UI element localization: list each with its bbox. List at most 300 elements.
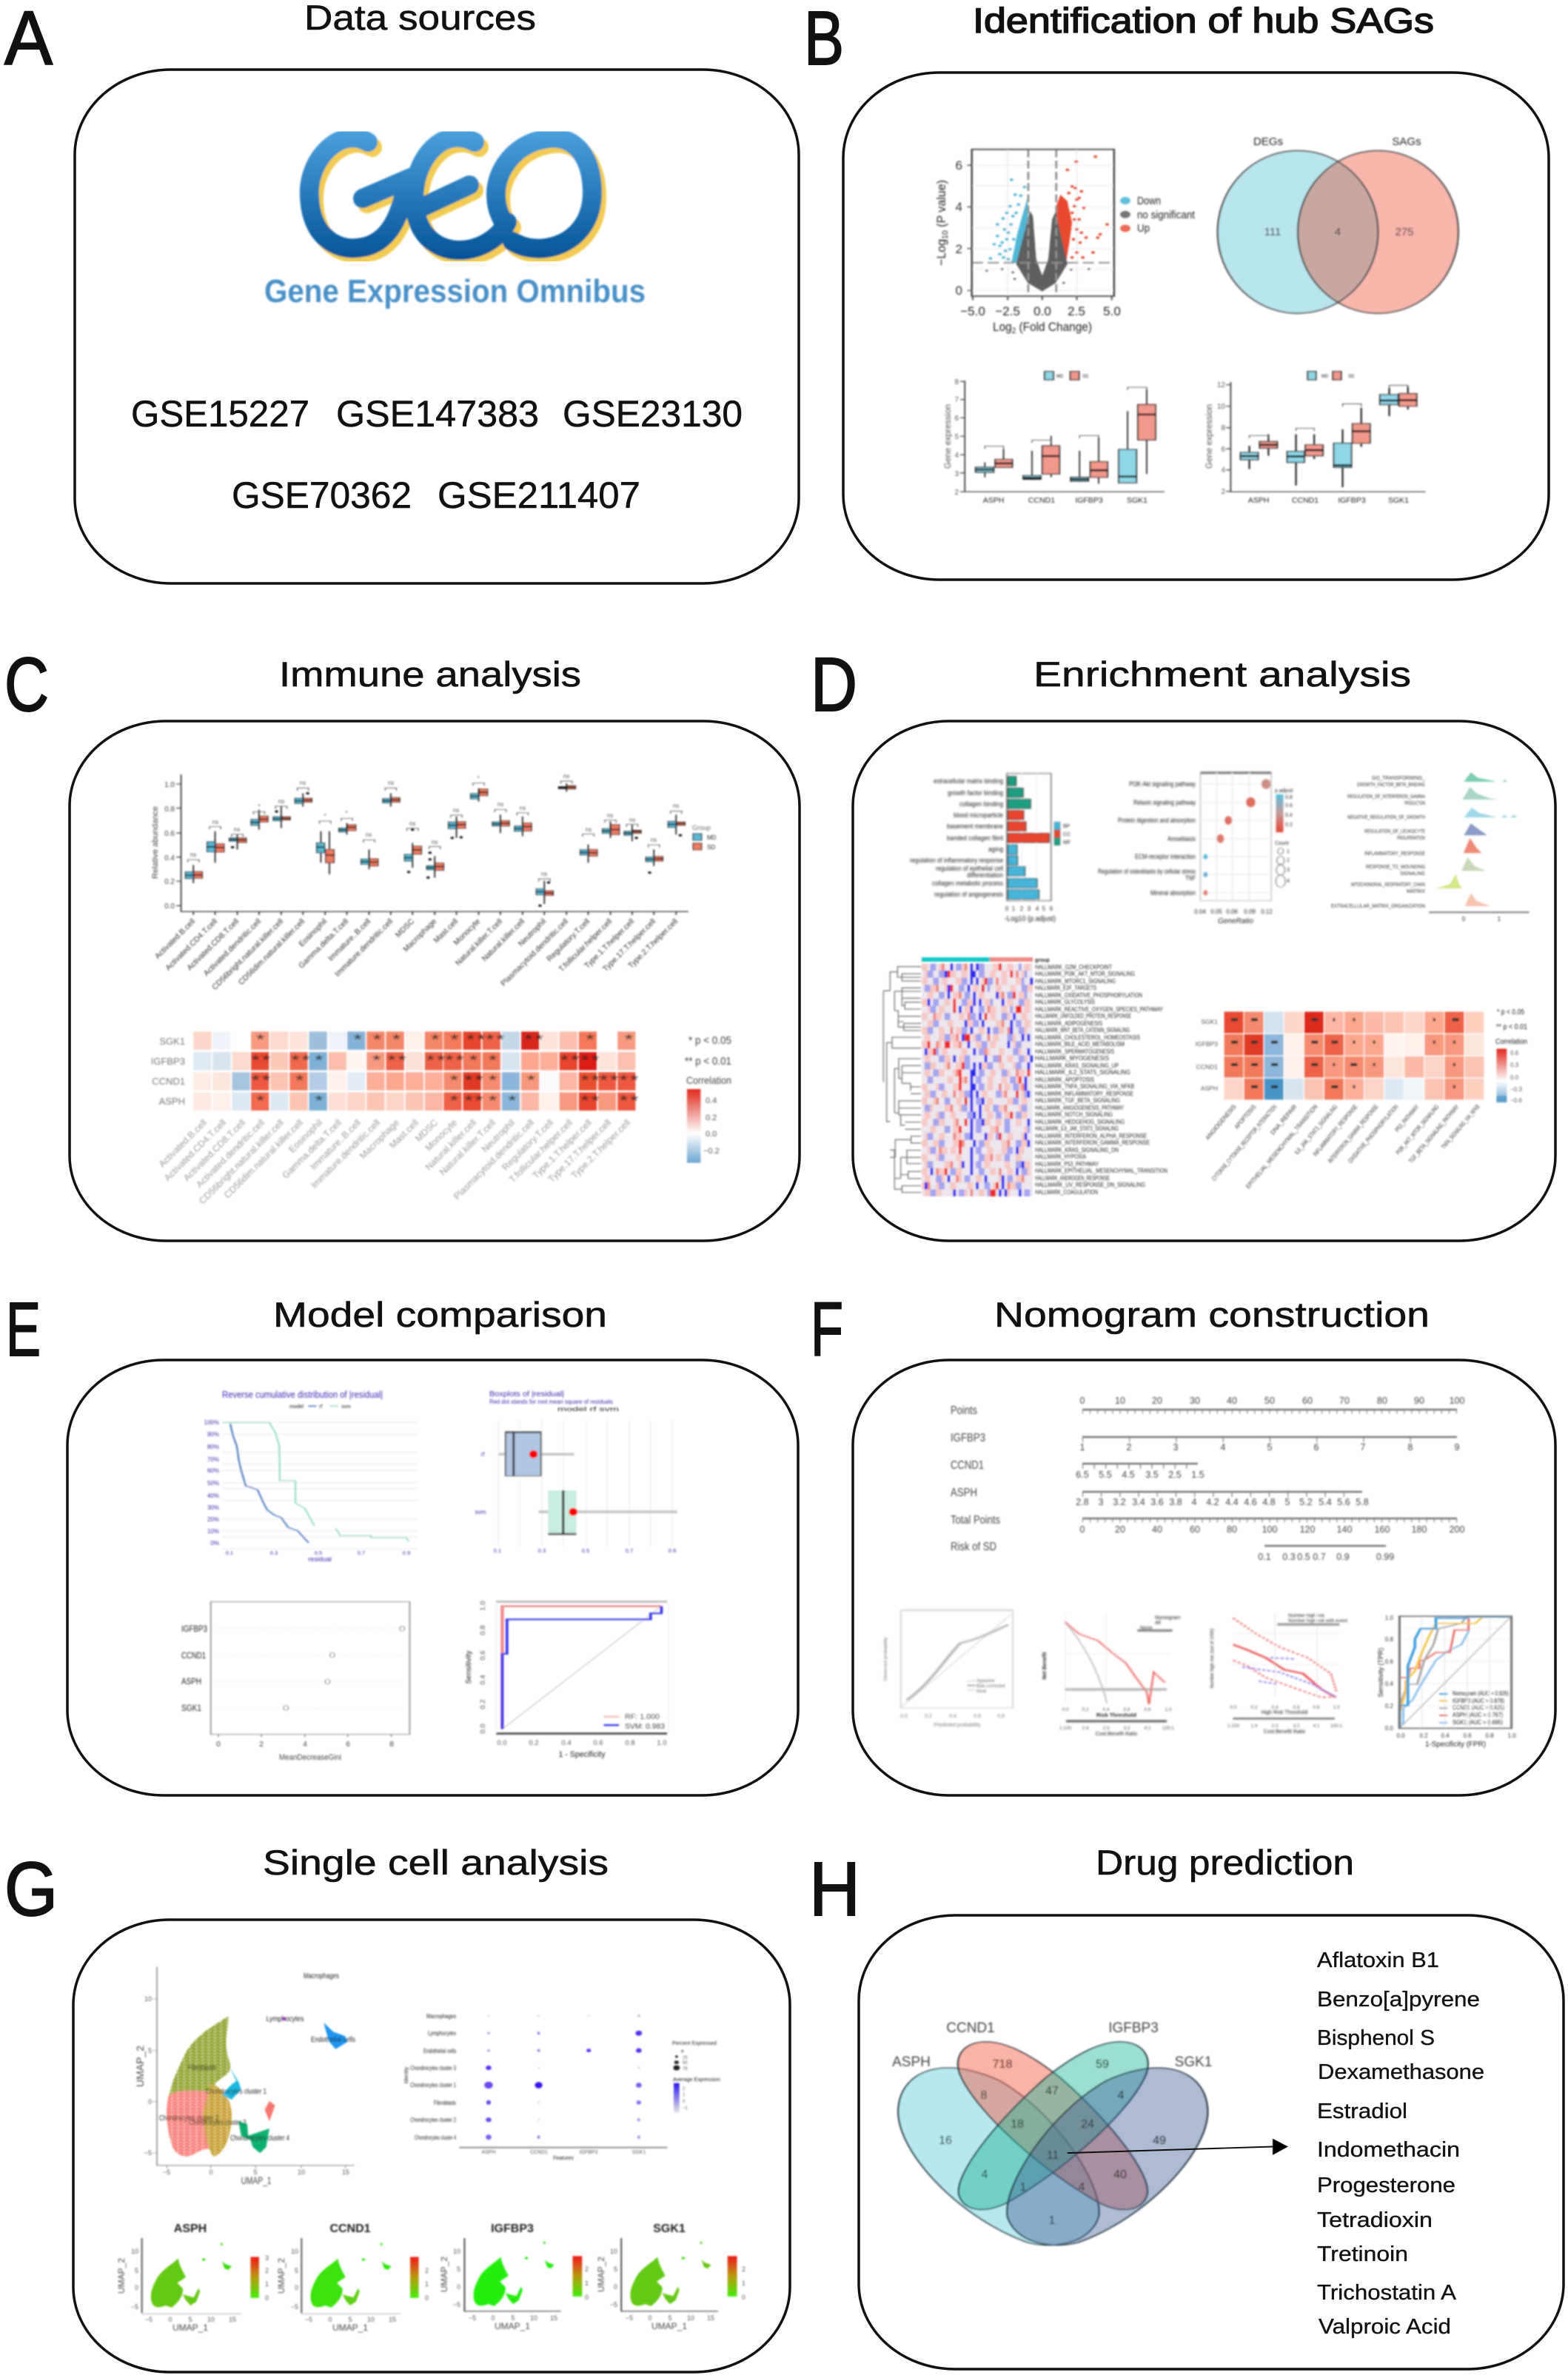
heatmap: gene-pathway correlation: 0.3 <box>1510 1062 1519 1068</box>
heatmap: gene-immune cell correlation: Plasmacytoid.dendritic.cell <box>452 1117 536 1202</box>
venn diagram: DEGs vs SAGs: DEGs <box>1253 135 1283 148</box>
UMAP cluster plot: Chondrocytes cluster 2 <box>159 2114 218 2123</box>
UMAP cluster plot: UMAP_2 <box>134 2046 146 2087</box>
ROC curves: nomogram and genes: 1-Specificity (FPR) <box>1425 1741 1486 1749</box>
feature plot: ASPH: 15 <box>229 2316 236 2323</box>
decision curve analysis: None <box>1140 1626 1153 1631</box>
feature plot: ASPH: −5 <box>145 2316 153 2323</box>
box plot: validation set gene expression: 2 <box>1221 488 1225 496</box>
feature plot: CCND1: 15 <box>389 2316 396 2323</box>
bubble plot: KEGG enrichment: Mineral absorption <box>1150 889 1196 897</box>
bar chart: GO enrichment <box>910 774 1071 923</box>
bubble plot: KEGG enrichment: p.adjust <box>1275 788 1293 794</box>
feature plot: ASPH: ASPH <box>174 2223 207 2235</box>
nomogram: 0 <box>1080 1396 1085 1406</box>
heatmap: GSVA pathways with dendrogram: HALLMARK_MYOGENESIS <box>1035 1054 1109 1062</box>
clinical impact curve: 1:4 <box>1250 1724 1258 1729</box>
nomogram: 0.3 <box>1282 1552 1296 1562</box>
heatmap: gene-immune cell correlation: Activated.CD4.T.cell <box>162 1117 228 1183</box>
heatmap: gene-immune cell correlation: Natural.killer.cell <box>423 1117 478 1172</box>
nomogram: IGFBP3 <box>951 1432 985 1444</box>
ROC curves: nomogram and genes: 0.6 <box>1463 1732 1472 1739</box>
nomogram: 3.6 <box>1150 1497 1164 1507</box>
ROC curves: RF vs SVM: 0.6 <box>479 1650 487 1661</box>
dot plot: random forest importance <box>181 1601 409 1762</box>
panel letter H: H <box>809 1846 860 1932</box>
clinical impact curve: 1:100 <box>1227 1724 1240 1729</box>
heatmap: GSVA pathways with dendrogram: HALLMARK_INTERFERON_ALPHA_RESPONSE <box>1035 1132 1147 1139</box>
venn diagram: four genes: ASPH <box>892 2054 931 2070</box>
box plot: residuals: 0.3 <box>538 1547 546 1554</box>
box plot: immune cell abundance: 0.8 <box>164 805 175 814</box>
venn diagram: four genes <box>892 2020 1212 2245</box>
nomogram: 1.5 <box>1191 1470 1205 1480</box>
dot plot: random forest importance: MeanDecreaseGini <box>279 1753 341 1762</box>
bubble plot: KEGG enrichment: 4 <box>1287 879 1290 884</box>
heatmap: GSVA pathways with dendrogram: HALLMARK_UNFOLDED_PROTEIN_RESPONSE <box>1035 1012 1131 1019</box>
venn diagram: four genes: 4 <box>982 2168 988 2181</box>
ridge plot: GSEA: NEGATIVE_REGULATION_OF_GROWTH <box>1347 814 1425 820</box>
box plot: immune cell abundance: * <box>324 813 326 820</box>
drug list: Tetradioxin <box>1317 2208 1433 2232</box>
heatmap: gene-immune cell correlation: 0.4 <box>706 1096 717 1105</box>
nomogram: 5.2 <box>1299 1497 1313 1507</box>
ROC curves: nomogram and genes: 0.4 <box>1385 1681 1394 1687</box>
calibration curve <box>883 1610 1013 1728</box>
UMAP cluster plot: 10 <box>144 1995 152 2003</box>
nomogram: 0 <box>1080 1524 1085 1535</box>
feature plot: ASPH: 1 <box>265 2280 269 2288</box>
nomogram: 200 <box>1450 1524 1464 1535</box>
dot plot: random forest importance: 4 <box>303 1740 307 1749</box>
decision curve analysis: 3:2 <box>1123 1726 1130 1731</box>
nomogram: 3 <box>1173 1442 1179 1453</box>
nomogram: 7 <box>1361 1442 1366 1453</box>
feature plot: IGFBP3: −5 <box>469 2314 476 2322</box>
heatmap: GSVA pathways with dendrogram: HALLMARK_APOPTOSIS <box>1035 1076 1094 1083</box>
nomogram: 4.2 <box>1206 1497 1219 1507</box>
arrow <box>1068 2139 1288 2155</box>
box plot: validation set gene expression: IGFBP3 <box>1338 496 1366 505</box>
box plot: immune cell abundance: Mast.cell <box>432 917 460 945</box>
dot plot: gene expression by cell type: Features <box>553 2156 574 2161</box>
nomogram: ASPH <box>951 1487 977 1499</box>
heatmap: gene-immune cell correlation: Type.1.T.helper.cell <box>531 1117 594 1181</box>
box plot: residuals: 0.7 <box>626 1547 633 1554</box>
clinical impact curve: 1.0 <box>1333 1705 1340 1710</box>
venn diagram: four genes: 718 <box>993 2058 1012 2071</box>
panel letter D: D <box>811 642 857 727</box>
heatmap: GSVA pathways with dendrogram <box>883 957 1167 1196</box>
ridge plot: GSEA: 0 <box>1462 916 1466 922</box>
line chart: reverse cumulative distribution of residuals: 40% <box>207 1493 219 1499</box>
bubble plot: KEGG enrichment: Count <box>1275 841 1289 846</box>
heatmap: gene-immune cell correlation: CD56dim.natural.killer.cell <box>222 1117 305 1200</box>
box plot: immune cell abundance: 0.0 <box>164 902 175 911</box>
drug list: Dexamethasone <box>1318 2060 1484 2084</box>
ridge plot: GSEA: PRODUCTION <box>1404 800 1425 806</box>
volcano plot: (Fold Change) <box>1016 320 1092 334</box>
venn diagram: four genes: 59 <box>1096 2058 1109 2071</box>
box plot: immune cell abundance: ns <box>190 851 196 858</box>
decision curve analysis: All <box>1155 1621 1161 1626</box>
dot plot: gene expression by cell type: Percent Expressed <box>672 2041 717 2046</box>
dot plot: gene expression by cell type: 50 <box>683 2061 688 2066</box>
box plot: training set gene expression: 4 <box>954 452 959 460</box>
line chart: reverse cumulative distribution of residuals: 10% <box>207 1528 219 1535</box>
heatmap: gene-immune cell correlation: *********** <box>256 1093 638 1109</box>
box plot: immune cell abundance: Immature..B.cell <box>326 917 372 963</box>
decision curve analysis: 1:4 <box>1082 1726 1089 1731</box>
clinical impact curve: 100:1 <box>1330 1724 1343 1729</box>
dot plot: random forest importance: SGK1 <box>181 1704 201 1713</box>
box plot: residuals: 0.1 <box>494 1547 501 1554</box>
panel: F nomogram construction <box>853 1360 1555 1795</box>
UMAP cluster plot: 10 <box>298 2168 305 2176</box>
nomogram: 80 <box>1227 1524 1237 1535</box>
clinical impact curve: 0.0 <box>1230 1705 1237 1710</box>
UMAP cluster plot: 5 <box>253 2168 258 2176</box>
nomogram: 50 <box>1264 1396 1275 1406</box>
feature plot: IGFBP3: IGFBP3 <box>491 2223 534 2235</box>
dot plot: random forest importance: 8 <box>389 1740 394 1749</box>
feature plot: ASPH: 0 <box>265 2294 269 2302</box>
ROC curves: nomogram and genes: ASPH (AUC = 0.767) <box>1453 1712 1503 1718</box>
box plot: immune cell abundance: * <box>258 803 261 810</box>
heatmap: gene-pathway correlation: Correlation <box>1495 1038 1527 1046</box>
heatmap: gene-immune cell correlation: ************** <box>256 1031 633 1048</box>
feature plot: ASPH: 10 <box>207 2316 215 2323</box>
feature plot: ASPH: 3 <box>265 2254 269 2262</box>
ROC curves: RF vs SVM: 0.8 <box>625 1739 635 1747</box>
UMAP cluster plot: 0 <box>148 2098 152 2106</box>
nomogram: 2 <box>1127 1442 1132 1453</box>
box plot: immune cell abundance: ns <box>651 837 657 843</box>
bubble plot: KEGG enrichment: 1 <box>1287 849 1290 854</box>
nomogram: 2.5 <box>1168 1470 1182 1480</box>
nomogram: 3.8 <box>1169 1497 1182 1507</box>
nomogram: 100 <box>1450 1396 1464 1406</box>
UMAP cluster plot: 0 <box>209 2168 213 2176</box>
feature plot: CCND1: 0 <box>295 2284 298 2291</box>
heatmap: GSVA pathways with dendrogram: HALLMARK_G2M_CHECKPOINT <box>1035 963 1112 971</box>
dot plot: gene expression by cell type: Endothelial cells <box>423 2048 456 2054</box>
heatmap: GSVA pathways with dendrogram: HALLMARK_CHOLESTEROL_HOMEOSTASIS <box>1035 1034 1140 1041</box>
UMAP cluster plot: Chondrocytes cluster 1 <box>206 2088 267 2096</box>
nomogram: 100 <box>1262 1524 1277 1535</box>
bubble plot: KEGG enrichment: 0.05 <box>1210 908 1222 915</box>
ROC curves: RF vs SVM: SVM: 0.983 <box>625 1722 665 1731</box>
line chart: reverse cumulative distribution of residuals: 0.3 <box>270 1550 278 1556</box>
heatmap: gene-immune cell correlation: ** p < 0.01 <box>685 1055 731 1068</box>
panel letter E: E <box>6 1287 41 1372</box>
dot plot: gene expression by cell type: Chondrocytes cluster 4 <box>415 2134 456 2141</box>
line chart: reverse cumulative distribution of residuals: rf <box>319 1404 322 1410</box>
box plot: training set gene expression: 2 <box>954 489 959 497</box>
box plot: immune cell abundance: ns <box>453 807 459 814</box>
box plot: immune cell abundance: Activated.dendritic.cell <box>202 917 263 978</box>
box plot: immune cell abundance <box>151 773 717 992</box>
venn diagram: four genes: 1 <box>1049 2214 1056 2227</box>
feature plot: IGFBP3: 0 <box>457 2283 460 2291</box>
calibration curve: 0.6 <box>974 1714 981 1719</box>
feature plot: IGFBP3: 0 <box>585 2294 589 2301</box>
heatmap: gene-immune cell correlation: Activated.dendritic.cell <box>194 1117 267 1190</box>
volcano plot: −2.5 <box>995 304 1020 318</box>
feature plot: CCND1: 0 <box>425 2294 429 2302</box>
box plot: immune cell abundance: Activated.B.cell <box>153 917 197 961</box>
calibration curve: Ideal <box>976 1689 986 1694</box>
nomogram: 180 <box>1412 1524 1427 1535</box>
heatmap: GSVA pathways with dendrogram: HALLMARK_GLYCOLYSIS <box>1035 998 1095 1005</box>
heatmap: gene-pathway correlation: CYTOKINE_CYTOKINE_RECEPTOR_INTERACTION <box>1210 1103 1279 1182</box>
heatmap: gene-pathway correlation: APOPTOSIS <box>1233 1103 1258 1131</box>
box plot: training set gene expression: IGFBP3 <box>1075 496 1103 505</box>
venn diagram: four genes: 49 <box>1153 2134 1166 2147</box>
box plot: immune cell abundance: Regulatory.T.cell <box>545 917 592 963</box>
bar chart: GO enrichment: 1 <box>1012 905 1016 912</box>
bar chart: GO enrichment: blood microparticle <box>954 811 1003 820</box>
heatmap: GSVA pathways with dendrogram: HALLMARK_SPERMATOGENESIS <box>1035 1048 1114 1055</box>
nomogram: Risk of SD <box>951 1541 996 1553</box>
feature plot: CCND1: CCND1 <box>329 2223 371 2235</box>
panel: E model comparison <box>67 1360 798 1795</box>
line chart: reverse cumulative distribution of residuals: 70% <box>207 1456 219 1463</box>
panel: G single cell analysis <box>73 1920 790 2372</box>
venn diagram: four genes: 8 <box>981 2089 988 2102</box>
volcano plot: 10 <box>941 230 950 239</box>
decision curve analysis <box>1042 1612 1181 1737</box>
venn diagram: four genes: 24 <box>1081 2118 1094 2131</box>
heatmap: gene-immune cell correlation: −0.2 <box>703 1147 720 1156</box>
box plot: immune cell abundance: MDSC <box>394 917 416 940</box>
heatmap: gene-pathway correlation: P53_PATHWAY <box>1393 1103 1421 1133</box>
box plot: immune cell abundance: Eosinophil <box>297 917 329 948</box>
heatmap: gene-pathway correlation: IL6_JAK_STAT3_SIGNALING <box>1293 1103 1339 1156</box>
ridge plot: GSEA: GROWTH_FACTOR_BETA_BINDING <box>1357 781 1425 788</box>
nomogram: 3 <box>1099 1497 1104 1507</box>
heatmap: GSVA pathways with dendrogram: HALLMARK_E2F_TARGETS <box>1035 984 1096 991</box>
venn diagram: four genes: SGK1 <box>1175 2054 1212 2070</box>
bubble plot: KEGG enrichment: 0.12 <box>1261 908 1273 915</box>
clinical impact curve: 3:2 <box>1293 1724 1300 1729</box>
heatmap: gene-pathway correlation: ANGIOGENESIS <box>1204 1103 1238 1141</box>
box plot: immune cell abundance: ns <box>541 871 547 877</box>
heatmap: gene-pathway correlation: OXIDATIVE_PHOSPHORYLATION <box>1347 1103 1400 1165</box>
venn diagram: DEGs vs SAGs: 4 <box>1335 226 1341 238</box>
clinical impact curve <box>1210 1612 1347 1735</box>
box plot: immune cell abundance: CD56bright.natural.killer.cell <box>210 917 285 992</box>
box plot: immune cell abundance: 0.6 <box>164 830 175 838</box>
box plot: immune cell abundance: Natural.killer.T.cell <box>454 917 504 968</box>
feature plot: ASPH: 0 <box>135 2284 138 2291</box>
heatmap: gene-immune cell correlation: 0.0 <box>706 1130 717 1139</box>
heatmap: gene-immune cell correlation: Eosinophil <box>287 1117 324 1155</box>
box plot: immune cell abundance: ns <box>629 817 635 823</box>
nomogram: Total Points <box>951 1514 1000 1527</box>
nomogram: 0.1 <box>1258 1552 1271 1562</box>
clinical impact curve: 0.2 <box>1250 1705 1258 1710</box>
heatmap: gene-pathway correlation: SGK1 <box>1201 1018 1218 1025</box>
decision curve analysis: 4:1 <box>1144 1726 1151 1731</box>
nomogram: 20 <box>1115 1524 1125 1535</box>
venn diagram: four genes: 11 <box>1047 2149 1059 2162</box>
ROC curves: RF vs SVM: 0.2 <box>479 1699 487 1709</box>
feature plot: IGFBP3: 5 <box>457 2265 460 2273</box>
bar chart: GO enrichment: CC <box>1063 832 1071 837</box>
box plot: immune cell abundance: ns <box>497 801 503 808</box>
panel: C immune analysis <box>70 721 800 1241</box>
calibration curve: 0.2 <box>925 1714 932 1719</box>
feature plot: IGFBP3: 15 <box>550 2314 557 2322</box>
dot plot: gene expression by cell type: 0 <box>681 2050 684 2054</box>
heatmap: GSVA pathways with dendrogram: HALLMARK_KRAS_SIGNALING_UP <box>1035 1062 1119 1069</box>
feature plot: IGFBP3: UMAP_2 <box>439 2257 449 2292</box>
box plot: validation set gene expression: 10 <box>1217 403 1225 411</box>
dot plot: gene expression by cell type: CCND1 <box>530 2150 548 2155</box>
dot plot: gene expression by cell type: Chondrocytes cluster 2 <box>410 2117 456 2123</box>
heading: Nomogram construction: Nomogram construction <box>994 1295 1430 1334</box>
drug list: Trichostatin A <box>1317 2281 1457 2305</box>
heading: Drug prediction: Drug prediction <box>1096 1843 1354 1882</box>
bar chart: GO enrichment: 0 <box>1005 905 1009 912</box>
feature plot: SGK1: 0 <box>614 2283 617 2291</box>
nomogram: 160 <box>1375 1524 1390 1535</box>
box plot: immune cell abundance: ns <box>234 826 240 833</box>
heatmap: GSVA pathways with dendrogram: HALLMARK_WNT_BETA_CATENIN_SIGNALING <box>1035 1026 1130 1034</box>
decision curve analysis: 0.0 <box>1062 1707 1069 1712</box>
box plot: validation set gene expression: SGK1 <box>1388 496 1409 505</box>
box plot: immune cell abundance: Group <box>692 824 711 831</box>
venn diagram: DEGs vs SAGs <box>1218 135 1458 313</box>
decision curve analysis: 0.4 <box>1102 1707 1110 1712</box>
bubble plot: KEGG enrichment <box>1098 773 1293 925</box>
dot plot: random forest importance: 0 <box>216 1740 221 1749</box>
dot plot: gene expression by cell type: Macrophages <box>426 2013 456 2020</box>
calibration curve: Bias-corrected <box>976 1684 1005 1689</box>
drug list: Progesterone <box>1317 2174 1455 2197</box>
heatmap: gene-immune cell correlation: Monocyte <box>423 1117 459 1153</box>
bubble plot: KEGG enrichment: PI3K-Akt signaling pathway <box>1129 780 1196 788</box>
heatmap: gene-pathway correlation: −0.6 <box>1510 1097 1522 1104</box>
heading: Model comparison: Model comparison <box>273 1295 607 1334</box>
line chart: reverse cumulative distribution of residuals: 0.9 <box>403 1550 410 1556</box>
heatmap: GSVA pathways with dendrogram: HALLMARK_HEDGEHOG_SIGNALING <box>1035 1118 1125 1125</box>
nomogram: 5.5 <box>1099 1470 1112 1480</box>
nomogram: 60 <box>1302 1396 1313 1406</box>
ROC curves: RF vs SVM <box>465 1601 669 1759</box>
UMAP cluster plot: Chondrocytes cluster 4 <box>230 2134 289 2143</box>
box plot: immune cell abundance: ns <box>300 780 306 786</box>
line chart: reverse cumulative distribution of residuals: 90% <box>207 1431 219 1438</box>
feature plot: ASPH: UMAP_1 <box>172 2322 208 2333</box>
ridge plot: GSEA: INFLAMMATORY_RESPONSE <box>1364 850 1425 857</box>
feature plot: SGK1: UMAP_2 <box>596 2257 606 2292</box>
decision curve analysis: Net Benefit <box>1042 1652 1048 1679</box>
bar chart: GO enrichment: extracellular matrix binding <box>934 777 1003 786</box>
feature plot: SGK1: 0 <box>742 2294 746 2301</box>
dot plot: gene expression by cell type: −1 <box>683 2106 688 2111</box>
box plot: immune cell abundance: Type.2.T.helper.cell <box>626 917 680 971</box>
bubble plot: KEGG enrichment: 0.8 <box>1285 795 1293 800</box>
heatmap: gene-immune cell correlation <box>151 1031 731 1206</box>
feature plot: IGFBP3: 0 <box>491 2314 495 2322</box>
heatmap: GSVA pathways with dendrogram: HALLMARK_TGF_BETA_SIGNALING <box>1035 1096 1120 1104</box>
ridge plot: GSEA: SIGNALING <box>1400 870 1425 877</box>
heatmap: GSVA pathways with dendrogram: HALLMARK_BILE_ACID_METABOLISM <box>1035 1040 1125 1048</box>
ridge plot: GSEA: EXTRACELLULAR_MATRIX_ORGANIZATION <box>1331 902 1425 909</box>
heatmap: GSVA pathways with dendrogram: HALLMARK_KRAS_SIGNALING_DN <box>1035 1146 1119 1153</box>
dot plot: gene expression by cell type: IGFBP3 <box>580 2150 598 2155</box>
dot plot: random forest importance: ASPH <box>181 1678 201 1687</box>
feature plot: CCND1 <box>276 2223 429 2333</box>
heatmap: gene-immune cell correlation: Natural.killer.T.cell <box>438 1117 497 1177</box>
feature plot: SGK1: −5 <box>610 2301 617 2308</box>
feature plot: ASPH: 0 <box>168 2316 172 2323</box>
dot plot: gene expression by cell type: 75 <box>683 2067 688 2071</box>
volcano plot: 6 <box>956 158 962 173</box>
heatmap: gene-immune cell correlation: Correlation <box>686 1074 731 1086</box>
venn diagram: four genes: 1 <box>1020 2181 1027 2194</box>
box plot: immune cell abundance: T.follicular.helper.cell <box>557 917 614 974</box>
line chart: reverse cumulative distribution of residuals: 0.5 <box>315 1550 322 1556</box>
heatmap: GSVA pathways with dendrogram: HALLMARK_EPITHELIAL_MESENCHYMAL_TRANSITION <box>1035 1167 1167 1174</box>
box plot: validation set gene expression <box>1204 372 1426 505</box>
feature plot: SGK1: −5 <box>626 2314 633 2322</box>
feature plot: CCND1: −5 <box>291 2303 298 2311</box>
heatmap: GSVA pathways with dendrogram: HALLMARK_NOTCH_SIGNALING <box>1035 1111 1113 1118</box>
volcano plot: Up <box>1137 222 1150 235</box>
box plot: training set gene expression: 7 <box>954 396 959 404</box>
box plot: immune cell abundance: ns <box>607 812 613 819</box>
dataset accession numbers: GSE70362 <box>232 475 412 516</box>
heatmap: gene-immune cell correlation: T.follicular.helper.cell <box>507 1117 574 1185</box>
box plot: immune cell abundance: Activated.CD8.T.cell <box>185 917 241 973</box>
box plot: validation set gene expression: 4 <box>1221 466 1225 475</box>
nomogram: 30 <box>1190 1396 1200 1406</box>
ROC curves: RF vs SVM: Sensitivity <box>465 1650 473 1684</box>
bubble plot: KEGG enrichment: Regulation of osteoblasts by cellular stress <box>1098 868 1196 876</box>
feature plot: CCND1: −5 <box>305 2316 312 2323</box>
box plot: validation set gene expression: ASPH <box>1248 496 1269 505</box>
nomogram: 0.99 <box>1376 1552 1394 1562</box>
nomogram: 3.5 <box>1145 1470 1159 1480</box>
feature plot: ASPH: 2 <box>265 2267 269 2274</box>
feature plot: CCND1: UMAP_1 <box>332 2322 368 2333</box>
calibration curve: Apparent <box>976 1679 995 1684</box>
heatmap: gene-immune cell correlation: Type.17.T.helper.cell <box>546 1117 613 1185</box>
heatmap: GSVA pathways with dendrogram: HALLMARK_ANGIOGENESIS_PATHWAY <box>1035 1104 1124 1111</box>
line chart: reverse cumulative distribution of residuals: 80% <box>207 1444 219 1450</box>
bubble plot: KEGG enrichment: 0.09 <box>1244 908 1256 915</box>
panel: D enrichment analysis <box>853 721 1555 1241</box>
ROC curves: nomogram and genes: 0.0 <box>1385 1725 1394 1732</box>
ROC curves: RF vs SVM: RF: 1.000 <box>625 1712 660 1721</box>
heatmap: gene-pathway correlation: INFLAMMATORY_RESPONSE <box>1311 1103 1359 1158</box>
line chart: reverse cumulative distribution of residuals: 0.7 <box>358 1550 365 1556</box>
box plot: validation set gene expression: 8 <box>1221 424 1225 432</box>
dataset accession numbers: GSE211407 <box>438 475 640 516</box>
line chart: reverse cumulative distribution of residuals: Reverse cumulative distribution of |residual| <box>222 1389 383 1400</box>
heatmap: gene-pathway correlation: 0.6 <box>1510 1050 1519 1056</box>
venn diagram: four genes: 16 <box>939 2134 952 2147</box>
nomogram: 60 <box>1190 1524 1200 1535</box>
panel: A data sources <box>75 70 799 583</box>
dot plot: gene expression by cell type: Average Expression <box>673 2077 720 2083</box>
ROC curves: nomogram and genes: 0.2 <box>1419 1732 1428 1739</box>
heatmap: gene-immune cell correlation: Type.2.T.helper.cell <box>569 1117 632 1181</box>
nomogram: 5 <box>1285 1497 1290 1507</box>
